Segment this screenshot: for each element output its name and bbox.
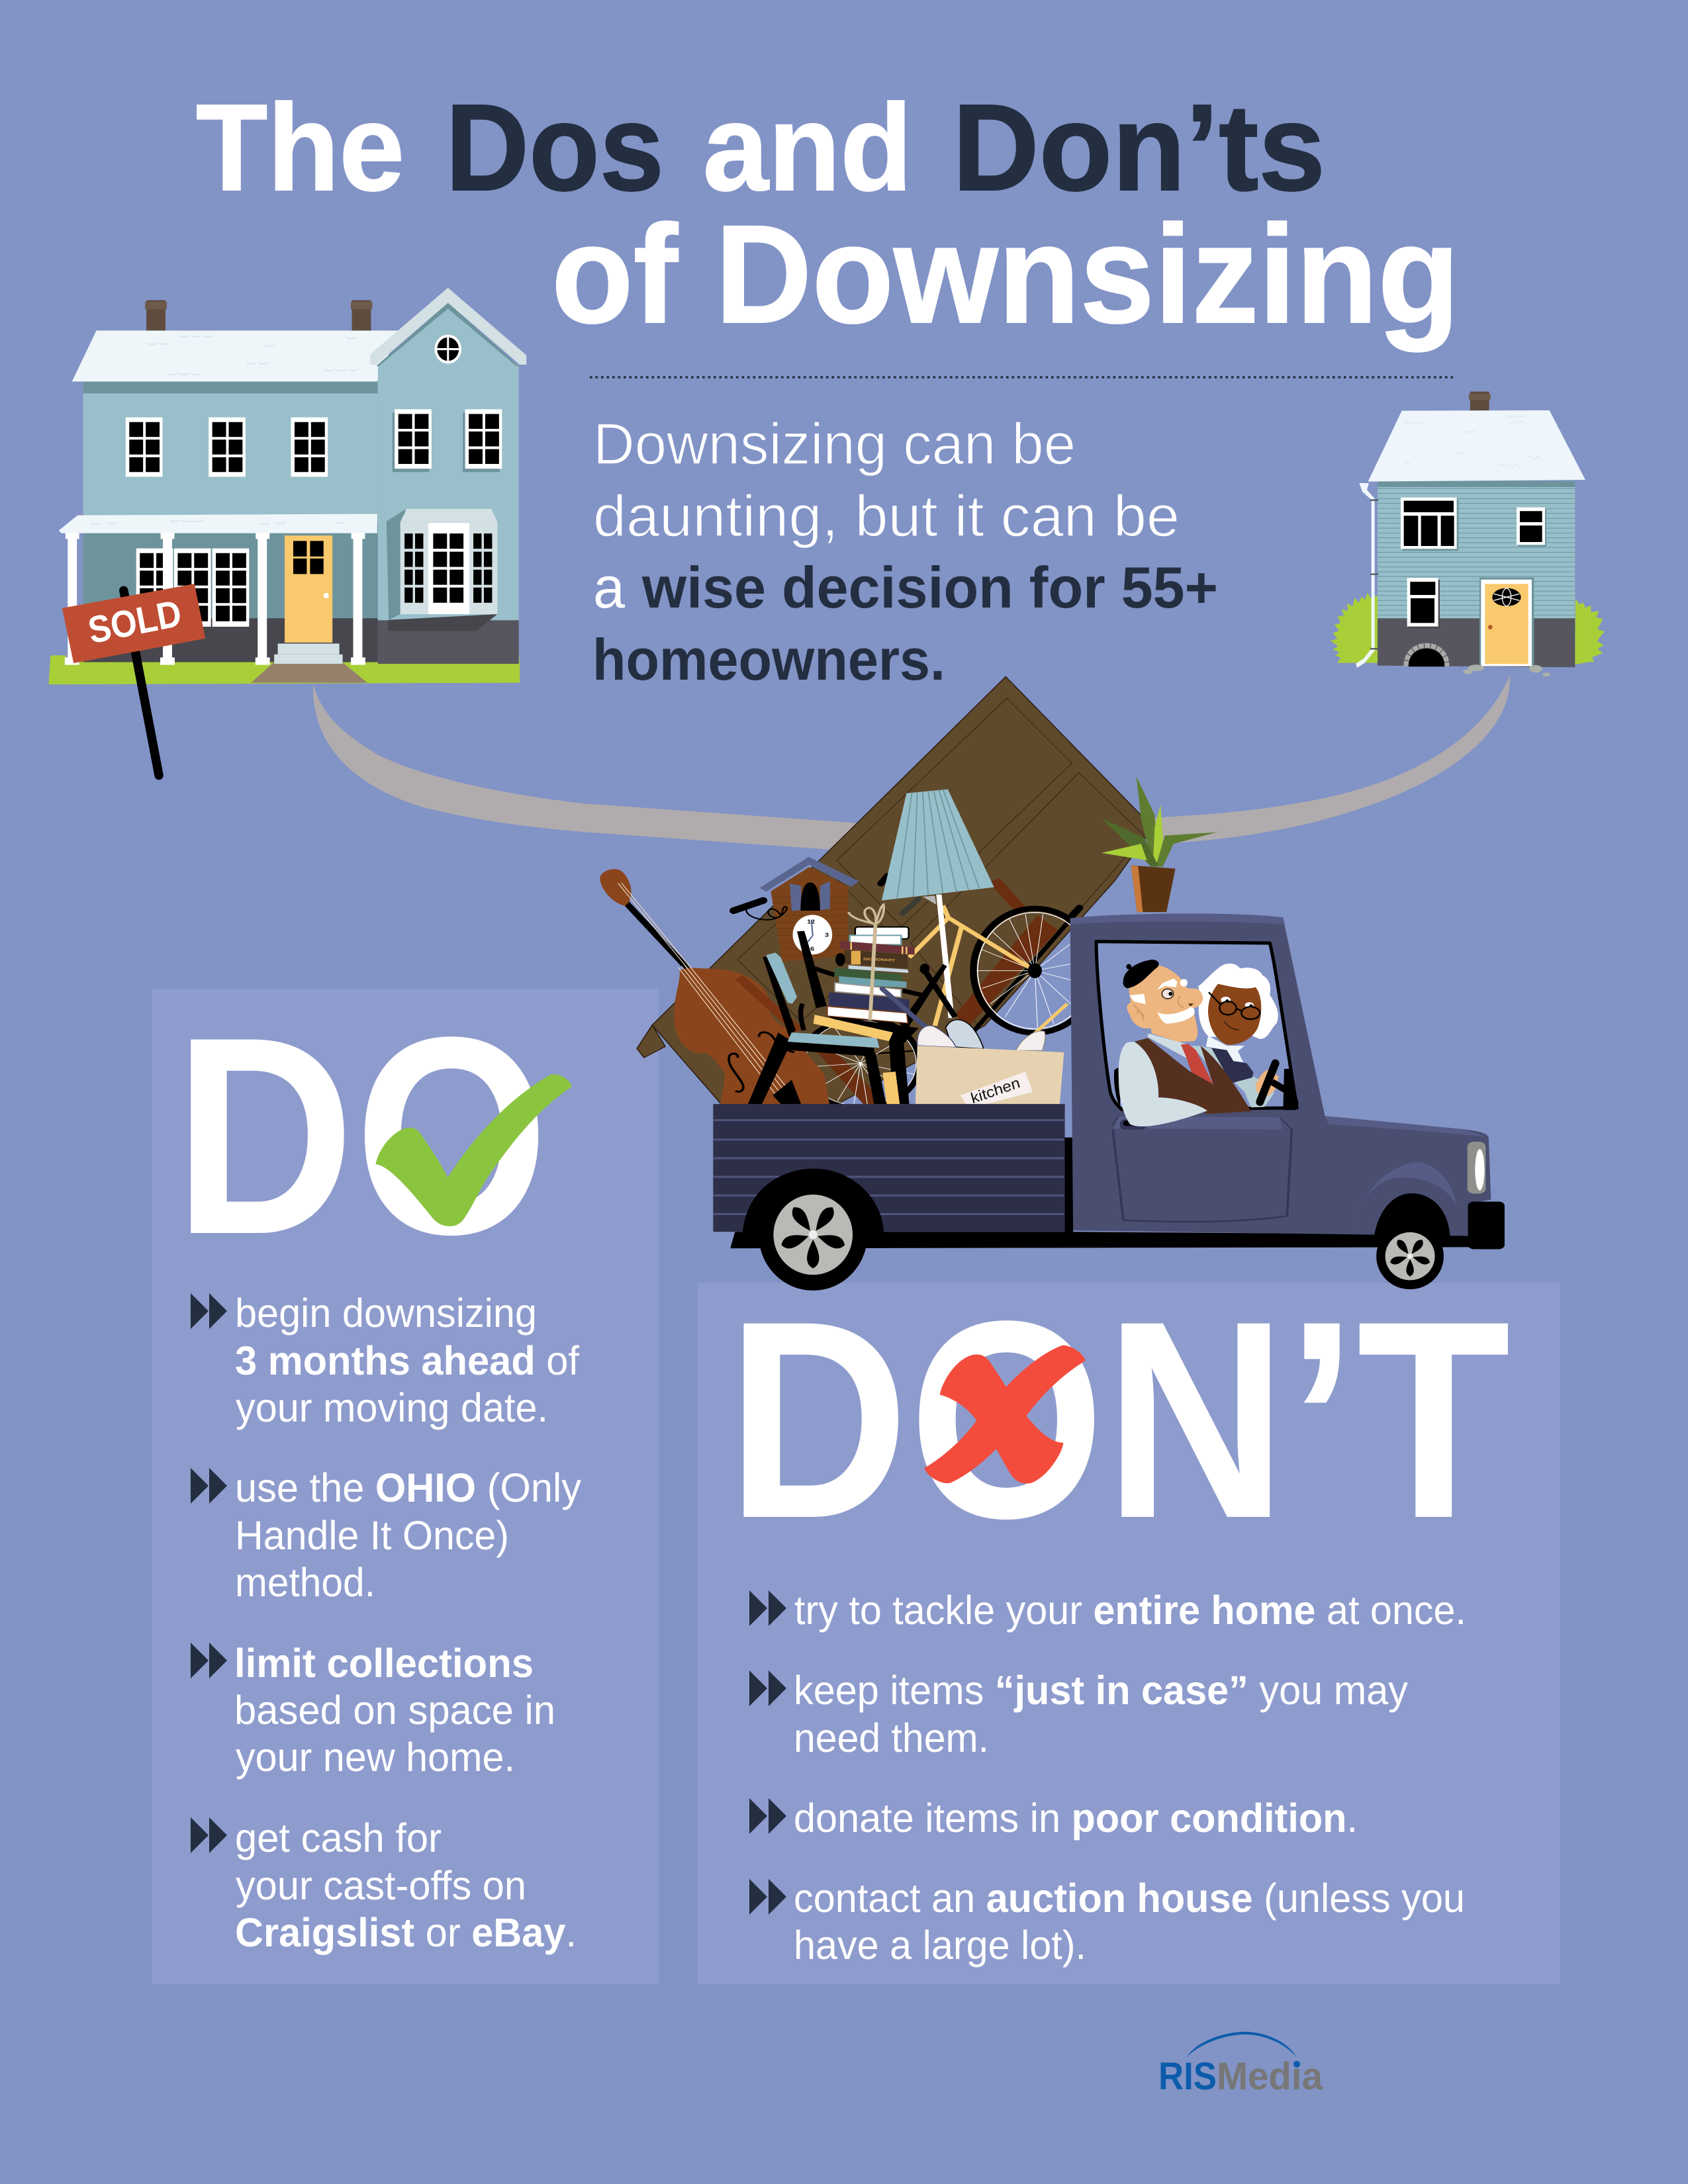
steps <box>278 643 340 655</box>
don't list: try to tackle your entire home at once. <box>794 1588 1466 1633</box>
title: Don’ts <box>953 79 1325 216</box>
door ledge <box>1112 1116 1292 1130</box>
windows <box>1403 500 1458 551</box>
fender highlight <box>1354 1162 1456 1228</box>
yellow chair <box>797 931 955 1108</box>
front door <box>1479 578 1534 666</box>
cab door <box>1113 1129 1291 1222</box>
headlight <box>1468 1142 1485 1194</box>
do list: your new home. <box>236 1735 515 1780</box>
path <box>251 662 367 683</box>
wall with siding <box>1378 481 1575 619</box>
porch windows <box>136 549 173 627</box>
don't list: need them. <box>794 1715 989 1760</box>
panel: DO <box>152 979 659 1984</box>
illustration: couple in the cab <box>1096 942 1299 1130</box>
gable wing <box>378 308 519 620</box>
rocks <box>1463 664 1550 676</box>
illustration: double bass <box>600 869 829 1104</box>
icon: green check mark <box>375 1074 572 1226</box>
illustration: large house with sold sign <box>48 288 526 775</box>
intro text: daunting, but it can be <box>593 483 1180 549</box>
title <box>196 79 1460 352</box>
cab window <box>1096 942 1297 1110</box>
cuckoo clock: 3 <box>825 932 829 938</box>
wardrobe side stripes <box>814 878 1058 1104</box>
truck bed <box>713 1104 1065 1232</box>
logo: RISMedia <box>1158 2032 1323 2098</box>
don't list: contact an auction house (unless you <box>794 1876 1465 1921</box>
do list: get cash for <box>235 1815 442 1860</box>
intro text: a <box>593 555 625 620</box>
steering wheel and hand <box>1256 1064 1299 1110</box>
illustration: wardrobe on the truck <box>637 676 1153 1105</box>
illustration: small house <box>1331 392 1605 676</box>
front wheel <box>1374 1193 1450 1289</box>
icon: red x mark <box>924 1345 1086 1484</box>
do list: your moving date. <box>236 1385 548 1430</box>
title: and <box>703 79 912 216</box>
don't list: donate items in poor condition. <box>794 1796 1358 1841</box>
main wall <box>83 381 378 523</box>
illustration: chairs, books and box <box>748 905 1067 1108</box>
cuckoo clock: 12 <box>807 919 815 925</box>
foundation <box>1378 618 1575 667</box>
don't list: keep items “just in case” you may <box>794 1668 1408 1713</box>
do list: use the OHIO (Only <box>235 1465 581 1510</box>
sold sign <box>62 584 205 775</box>
cardboard box: kitchen <box>967 1075 1023 1107</box>
illustration: truck <box>713 776 1505 1291</box>
woman <box>1198 964 1278 1107</box>
front door <box>285 535 332 643</box>
title: The <box>196 79 404 216</box>
bushes <box>1331 592 1605 664</box>
illustration: household load <box>733 790 1096 1109</box>
main roof <box>72 330 399 382</box>
cardboard box <box>915 1046 1064 1107</box>
cab <box>1070 913 1491 1236</box>
rear wheel <box>742 1169 884 1291</box>
heading: DON'T: DON’T <box>727 1263 1511 1577</box>
blue chair <box>748 952 886 1104</box>
intro text: homeowners. <box>592 627 945 692</box>
title: of Downsizing <box>551 196 1460 352</box>
do list: limit collections <box>234 1641 534 1686</box>
do list: Craigslist or eBay. <box>235 1910 577 1955</box>
title: Dos <box>445 79 664 216</box>
chimneys <box>146 300 371 332</box>
intro text: wise decision for 55+ <box>641 555 1218 620</box>
roof <box>1368 410 1585 482</box>
do list: Handle It Once) <box>235 1513 509 1558</box>
bicycle <box>802 876 1096 1109</box>
frying pan and slippers <box>882 989 1067 1050</box>
intro text: Downsizing can be <box>593 411 1076 477</box>
road <box>313 675 1510 852</box>
lamp <box>882 790 994 1018</box>
sold sign: SOLD <box>85 592 185 651</box>
man <box>1119 960 1251 1126</box>
cuckoo clock: 6 <box>810 946 815 952</box>
intro text <box>592 411 1218 692</box>
logo: RISMedia: RIS <box>1158 2055 1217 2098</box>
do list: based on space in <box>234 1688 555 1733</box>
downspout <box>1356 483 1375 668</box>
dotted divider <box>590 376 1454 379</box>
book stack <box>827 905 915 1023</box>
bay window <box>387 510 405 620</box>
upper windows <box>126 418 163 477</box>
do list <box>191 1291 581 1955</box>
cellar arch <box>1409 649 1445 666</box>
don't list: have a large lot). <box>794 1923 1086 1968</box>
cuckoo clock <box>733 857 859 962</box>
do list: your cast-offs on <box>236 1863 526 1908</box>
chimney <box>1470 392 1489 412</box>
heading: DO: DO <box>174 979 549 1293</box>
bumper <box>1468 1202 1505 1250</box>
porch roof <box>59 514 377 533</box>
grass <box>48 654 520 684</box>
do list: method. <box>235 1560 375 1605</box>
do list: 3 months ahead of <box>235 1338 580 1383</box>
do list: begin downsizing <box>235 1291 537 1336</box>
potted plant <box>1102 776 1217 912</box>
porch columns <box>65 531 365 665</box>
logo: RISMedia: Media <box>1217 2055 1323 2098</box>
book stack: DICTIONARY <box>863 958 895 962</box>
don't list <box>749 1588 1466 1968</box>
panel: DON'T <box>698 1263 1560 1984</box>
